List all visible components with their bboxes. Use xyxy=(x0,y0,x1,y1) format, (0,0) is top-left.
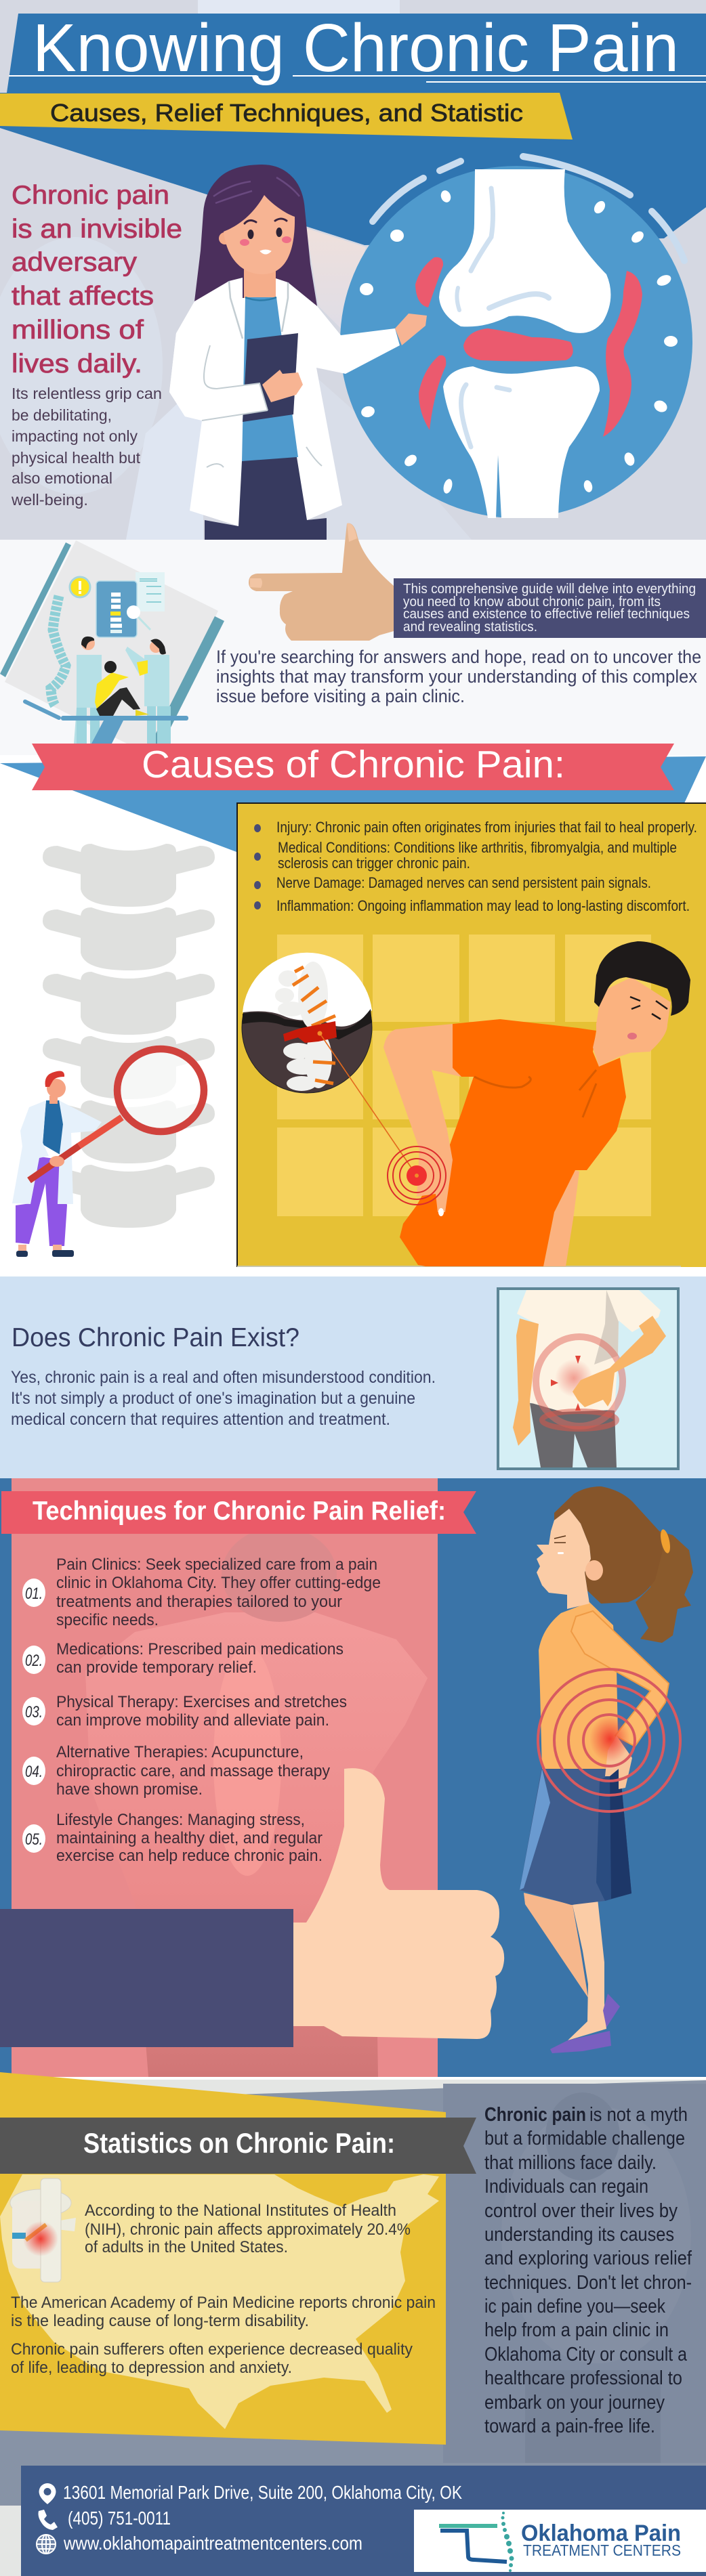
callout: comprehensive guide box: causes and existence to effective relief techniques xyxy=(403,606,690,622)
panel: causes section background xyxy=(0,755,706,1276)
contact details: (405) 751-0011 xyxy=(68,2508,171,2529)
title: Knowing Chronic Pain xyxy=(33,10,679,86)
list text: Physical Therapy: Exercises and stretches xyxy=(56,1693,347,1711)
icon: pain target rings xyxy=(388,1146,446,1205)
heading: invisible adversary xyxy=(12,181,182,379)
list text: Alternative Therapies: Acupuncture, xyxy=(56,1743,304,1761)
text block: statistics: The American Academy of Pain Medicine reports chronic pain xyxy=(11,2294,436,2312)
panel: causes list card xyxy=(236,802,706,1267)
heading: invisible adversary: adversary xyxy=(12,248,138,277)
icon: pointing hand xyxy=(249,523,394,641)
subtitle ribbon: Causes, Relief Techniques, and Statistic xyxy=(50,99,523,127)
text block: yes chronic pain is real: It's not simply a product of one's imagination but a genuine xyxy=(11,1389,415,1408)
list text: Lifestyle Changes: Managing stress, xyxy=(56,1811,305,1829)
text block: searching for answers: issue before visiting a pain clinic. xyxy=(216,686,465,706)
heading: does chronic pain exist: Does Chronic Pain Exist? xyxy=(12,1323,299,1352)
list text: clinic in Oklahoma City. They offer cutting-edge xyxy=(56,1574,381,1592)
illustration: doctor in white coat xyxy=(169,165,427,540)
text block: relentless grip: Its relentless grip can xyxy=(12,385,162,402)
icon: globe xyxy=(37,2535,56,2554)
text block: yes chronic pain is real: Yes, chronic pain is a real and often misunderstood condition. xyxy=(11,1368,436,1387)
panel: intro section background xyxy=(0,540,706,755)
text block: conclusion: ic pain define you—seek xyxy=(484,2296,665,2317)
list text: can improve mobility and alleviate pain. xyxy=(56,1711,329,1730)
heading: invisible adversary: Chronic pain xyxy=(12,181,169,210)
text block: yes chronic pain is real: medical concern that requires attention and treatment. xyxy=(11,1410,390,1429)
panel: footer xyxy=(21,2466,706,2576)
number 02: 02. xyxy=(25,1652,43,1670)
map: united states xyxy=(0,2174,439,2429)
illustration: large spine vertebrae xyxy=(43,844,215,1228)
list text: Medications: Prescribed pain medications xyxy=(56,1640,344,1658)
text block: conclusion: healthcare professional to xyxy=(484,2367,682,2389)
illustration: spine inset circle xyxy=(242,953,417,1176)
text block: conclusion: understanding its causes xyxy=(484,2224,674,2246)
illustration: knee joint circle xyxy=(340,156,692,518)
list text xyxy=(56,1555,381,1865)
number 03: 03. xyxy=(25,1703,43,1721)
window panes xyxy=(277,935,651,1216)
contact details: www.oklahomapaintreatmentcenters.com xyxy=(63,2533,362,2554)
heading ribbon: statistics: Statistics on Chronic Pain: xyxy=(83,2127,395,2159)
number 01: 01. xyxy=(25,1585,43,1603)
icon: phone xyxy=(38,2510,58,2530)
text block: relentless grip: physical health but xyxy=(12,449,141,467)
logo: Oklahoma Pain Treatment Centers: Oklahoma Pain xyxy=(521,2520,681,2546)
panel: causes list card: Nerve Damage: Damaged nerves can send persistent pain signals. xyxy=(276,874,651,891)
callout: comprehensive guide box: and revealing statistics. xyxy=(403,619,537,635)
list: relief techniques xyxy=(22,1555,381,1865)
text block: relentless grip: well-being. xyxy=(11,491,88,509)
text block: statistics: is the leading cause of long-term disability. xyxy=(11,2312,309,2330)
text block: conclusion: Individuals can regain xyxy=(484,2176,648,2197)
heading ribbon: techniques xyxy=(1,1491,476,1534)
illustration: spine examination on laptop xyxy=(0,540,224,744)
number 05 xyxy=(22,1824,45,1853)
number 04: 04. xyxy=(25,1763,43,1781)
illustration: man holding lower back xyxy=(383,941,690,1266)
logo: Oklahoma Pain Treatment Centers: TREATMENT CENTERS xyxy=(523,2541,681,2559)
text block: statistics: According to the National Institutes of Health xyxy=(85,2202,396,2220)
text block: conclusion: is not a myth xyxy=(589,2104,688,2126)
subtitle ribbon xyxy=(0,93,573,139)
text block: conclusion: that millions face daily. xyxy=(484,2152,657,2174)
number 04 xyxy=(22,1757,45,1785)
text block: conclusion xyxy=(484,2104,692,2437)
text block: conclusion: control over their lives by xyxy=(484,2200,678,2222)
text block: yes chronic pain is real xyxy=(11,1368,436,1429)
panel: does chronic pain exist xyxy=(0,1276,706,1478)
callout: comprehensive guide box: you need to know about chronic pain, from its xyxy=(403,594,661,609)
panel: statistics background xyxy=(0,2077,706,2576)
heading ribbon: techniques: Techniques for Chronic Pain Relief: xyxy=(33,1497,446,1526)
text block: statistics xyxy=(11,2202,436,2377)
illustration: woman with back pain xyxy=(520,1486,693,2053)
list text: Pain Clinics: Seek specialized care from a pain xyxy=(56,1555,377,1574)
heading: invisible adversary: millions of xyxy=(12,316,144,345)
text block: relentless grip: impacting not only xyxy=(12,427,138,445)
list text: chiropractic care, and massage therapy xyxy=(56,1762,330,1780)
number 02 xyxy=(22,1646,45,1674)
illustration: framed man holding abdomen xyxy=(498,1289,678,1469)
panel: causes list card: sclerosis can trigger chronic pain. xyxy=(278,855,470,872)
heading ribbon: causes of chronic pain xyxy=(32,743,674,790)
text block: statistics: Chronic pain sufferers often experience decreased quality xyxy=(11,2340,413,2359)
number 03 xyxy=(22,1697,45,1725)
text block: relentless grip xyxy=(11,385,162,509)
heading ribbon: causes of chronic pain: Causes of Chronic Pain: xyxy=(142,743,565,786)
illustration: injured vertebra xyxy=(10,2178,76,2282)
heading: invisible adversary: is an invisible xyxy=(12,215,182,244)
logo: Oklahoma Pain Treatment Centers xyxy=(414,2510,706,2572)
contact details xyxy=(63,2482,462,2554)
text block: statistics: (NIH), chronic pain affects approximately 20.4% xyxy=(85,2220,411,2239)
panel: techniques background xyxy=(0,1478,706,2077)
text block: relentless grip: also emotional xyxy=(12,469,112,487)
number 05: 05. xyxy=(25,1830,43,1849)
heading ribbon: statistics xyxy=(0,2118,476,2174)
list text: specific needs. xyxy=(56,1611,159,1629)
panel: hero background xyxy=(0,0,706,540)
contact details: 13601 Memorial Park Drive, Suite 200, Oklahoma City, OK xyxy=(63,2482,462,2503)
icon: location pin xyxy=(39,2483,56,2504)
list text: exercise can help reduce chronic pain. xyxy=(56,1847,323,1865)
text block: conclusion: help from a pain clinic in xyxy=(484,2319,669,2341)
callout: comprehensive guide box xyxy=(394,578,706,638)
text block: conclusion: embark on your journey xyxy=(484,2392,665,2413)
heading: invisible adversary: that affects xyxy=(12,282,154,311)
text block: statistics: of life, leading to depression and anxiety. xyxy=(11,2359,292,2377)
illustration: doctor with magnifying glass xyxy=(12,1049,204,1257)
text block: relentless grip: be debilitating, xyxy=(12,406,112,424)
heading: invisible adversary: lives daily. xyxy=(12,349,142,379)
text block: conclusion: Chronic pain xyxy=(484,2104,586,2126)
text block: statistics: of adults in the United States. xyxy=(85,2238,288,2256)
list text: have shown promise. xyxy=(56,1780,203,1799)
list text: can provide temporary relief. xyxy=(56,1658,257,1677)
icon: thumbs up hand xyxy=(0,1768,504,2047)
text block: searching for answers xyxy=(216,647,701,706)
panel: yellow map card xyxy=(0,2072,446,2445)
number 01 xyxy=(22,1579,45,1607)
panel: blue header band xyxy=(0,14,706,245)
list text: treatments and therapies tailored to your xyxy=(56,1593,342,1611)
text block: conclusion: toward a pain-free life. xyxy=(484,2416,655,2437)
list text: maintaining a healthy diet, and regular xyxy=(56,1829,323,1847)
